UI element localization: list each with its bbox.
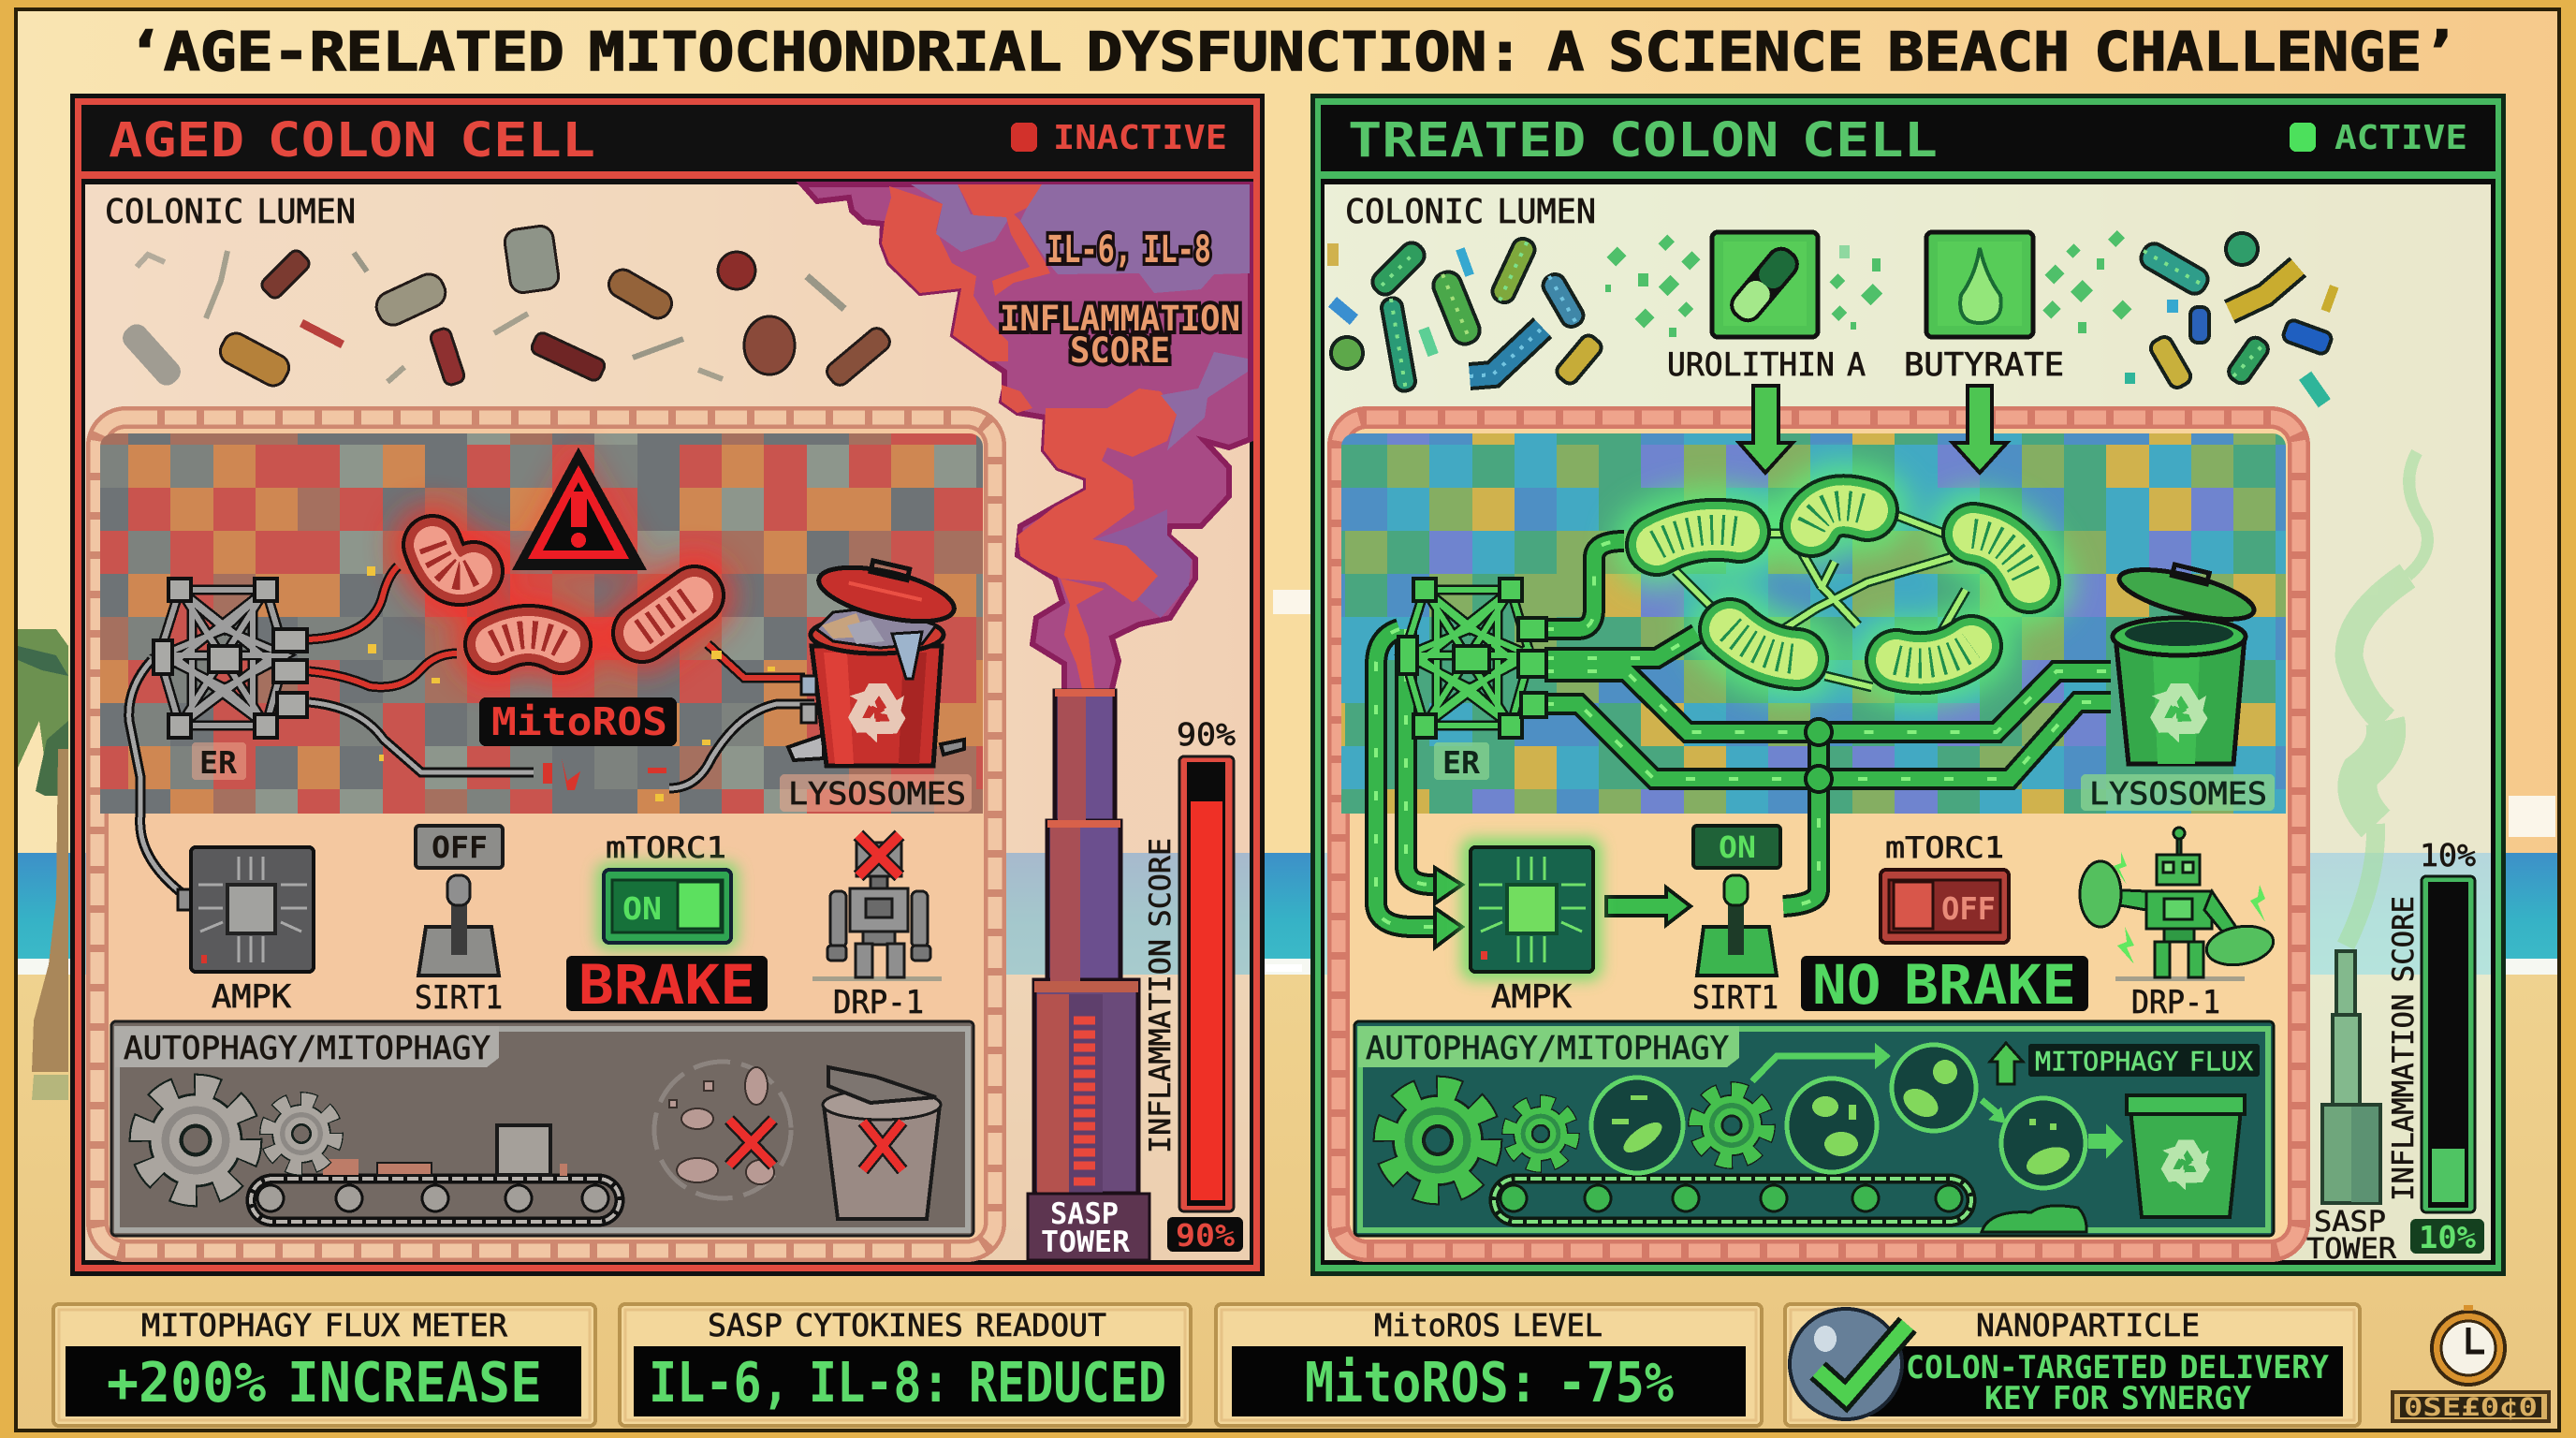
- tower indicator lights: [1074, 1020, 1095, 1181]
- SIRT1 lever: [1697, 875, 1777, 976]
- tab: AUTOPHAGY/MITOPHAGY: [124, 1030, 490, 1067]
- score counter: 0SE£0¢0: [2404, 1393, 2538, 1422]
- status: active: ACTIVE: [2334, 119, 2467, 157]
- stat card: SASP readout: [620, 1304, 1191, 1426]
- icon: overflowing lysosome bin: [788, 550, 964, 766]
- recycling bin: [2127, 1095, 2245, 1217]
- panel frame: [1310, 94, 2506, 1276]
- inflammation gauge 90%: [1167, 716, 1243, 1254]
- no brake label: NO BRAKE: [1812, 953, 2076, 1017]
- spinning gears: [1387, 1090, 1766, 1191]
- SIRT1 label: SIRT1: [1692, 979, 1778, 1017]
- SASP tower aged: SASP: [1050, 1197, 1119, 1231]
- stat card: mitophagy flux: +200% INCREASE: [107, 1350, 542, 1415]
- lysosomes label: LYSOSOMES: [2089, 775, 2267, 812]
- cell: aged: [97, 418, 995, 1251]
- header: aged colon cell: AGED COLON CELL: [109, 113, 595, 169]
- ER label: ER: [199, 744, 237, 781]
- mTORC1 toggle on: [596, 862, 739, 950]
- stat card: mitophagy flux: [53, 1304, 595, 1426]
- mitophagy flux tag: MITOPHAGY FLUX: [2035, 1046, 2253, 1077]
- SASP tower treated: TOWER: [2306, 1233, 2397, 1266]
- mTORC1 label: mTORC1: [606, 831, 726, 865]
- brake label: BRAKE: [578, 953, 755, 1017]
- icon: ER lattice: [154, 579, 307, 738]
- red glow: [432, 440, 695, 644]
- tab: AUTOPHAGY/MITOPHAGY: [1366, 1030, 1729, 1067]
- stat card: nanoparticle: NANOPARTICLE: [1976, 1307, 2200, 1343]
- metabolite particles: [1605, 230, 2132, 337]
- stat card: nanoparticle: [1785, 1304, 2360, 1426]
- ER label: [1434, 742, 1489, 781]
- bacteria: aged: [118, 225, 893, 390]
- AMPK chip active: [1461, 838, 1602, 980]
- sparks: [367, 566, 775, 801]
- AMPK chip inactive: [178, 847, 314, 972]
- lysosomes label: LYSOSOMES: [788, 775, 966, 812]
- coloured fragments: [1327, 243, 2338, 407]
- SIRT1 off tag: [416, 826, 503, 868]
- autophagosome vesicles: [1591, 1045, 2086, 1188]
- mTORC1 label: mTORC1: [1885, 831, 2004, 865]
- panel background: lumen: [85, 184, 1250, 1260]
- arrow: butyrate into cell: [1953, 386, 2007, 473]
- gears: [143, 1088, 334, 1193]
- cell membrane: [1339, 418, 2299, 1251]
- vertical label: inflammation score: INFLAMMATION SCORE: [1144, 838, 1178, 1153]
- tower label: SASP: [2314, 1206, 2386, 1239]
- SIRT1 on tag: ON: [1719, 829, 1756, 865]
- cell: treated: [1339, 386, 2299, 1251]
- icon: green lysosome bin: [2113, 552, 2261, 764]
- SASP tower aged: TOWER: [1041, 1225, 1130, 1259]
- ER label: ER: [1442, 744, 1480, 781]
- stat card: nanoparticle: COLON-TARGETED DELIVERY: [1906, 1349, 2330, 1387]
- cell membrane: [97, 418, 995, 1251]
- inflammation gauge 10%: [2410, 837, 2484, 1255]
- panel frame: [70, 94, 1265, 1276]
- inflammation gauge 90%: 90%: [1177, 716, 1236, 753]
- icon: ER lattice healthy: [1398, 579, 1546, 738]
- SIRT1 on tag: [1693, 826, 1780, 868]
- status: inactive: INACTIVE: [1053, 119, 1227, 157]
- status: active: [2290, 119, 2467, 157]
- moving conveyor: [1494, 1179, 1971, 1222]
- energised pipes: [1376, 541, 2111, 927]
- stat card: MitoROS level: MitoROS: -75%: [1305, 1350, 1674, 1415]
- stat card: mitophagy flux: MITOPHAGY FLUX METER: [141, 1307, 507, 1343]
- MitoROS label: MitoROS: [491, 699, 667, 744]
- panel background: lumen: [1325, 184, 2491, 1260]
- DRP-1 label: DRP-1: [833, 984, 924, 1021]
- healthy mitochondria network: [1657, 506, 2029, 687]
- icon: nanoparticle with check: [1790, 1309, 1908, 1419]
- damaged mitochondria: [432, 545, 695, 644]
- icon: active DRP-1 robot: [2080, 828, 2276, 981]
- title: ‘AGE-RELATED MITOCHONDRIAL DYSFUNCTION: A SCIENCE BEACH CHALLENGE’: [127, 22, 2458, 83]
- green glow: [1657, 506, 2029, 663]
- SASP tower aged: [1028, 689, 1149, 1260]
- urolithin label: UROLITHIN A: [1667, 346, 1866, 384]
- lumen label: COLONIC LUMEN: [1345, 193, 1596, 231]
- cytoplasm checker floor: [100, 433, 983, 814]
- mTORC1 toggle off: [1881, 870, 2009, 943]
- ER label: [192, 742, 246, 781]
- failed vesicle: [654, 1062, 791, 1198]
- pipe arrowheads: [1435, 868, 1690, 947]
- cytoplasm checker floor: [1341, 433, 2286, 814]
- inflammation gauge 10%: 10%: [2420, 837, 2476, 873]
- icon: urolithin A capsule: [1712, 232, 1818, 337]
- mTORC1 toggle on: ON: [622, 890, 662, 927]
- stat card: SASP readout: IL-6, IL-8: REDUCED: [649, 1350, 1166, 1415]
- stalled conveyor: [251, 1125, 620, 1222]
- right smoke: clean wisp: [2346, 452, 2427, 946]
- debris fragments: [137, 251, 844, 382]
- green blob: [1982, 1206, 2086, 1232]
- stat card: MitoROS level: [1216, 1304, 1762, 1426]
- header: treated colon cell: TREATED COLON CELL: [1348, 113, 1938, 169]
- panel: autophagy active: [1354, 1021, 2274, 1236]
- SASP smoke plume: [802, 184, 1251, 693]
- smoke labels: IL-6, IL-8: [1046, 228, 1211, 271]
- icon: broken DRP-1 robot: [812, 843, 942, 981]
- bacteria speckles: [1382, 241, 2263, 390]
- icon: clock: [2432, 1305, 2505, 1385]
- mitophagy flux tag: [1990, 1043, 2260, 1084]
- mTORC1 toggle off: OFF: [1941, 890, 1996, 927]
- smoke labels: SCORE: [1070, 330, 1170, 371]
- palm tree: [18, 629, 68, 1100]
- stat card: nanoparticle: KEY FOR SYNERGY: [1984, 1380, 2252, 1417]
- butyrate label: BUTYRATE: [1904, 346, 2064, 384]
- SIRT1 off tag: OFF: [432, 829, 488, 865]
- flux arrows: [1752, 1043, 2123, 1159]
- AMPK label: AMPK: [212, 978, 292, 1016]
- stat card: SASP readout: SASP CYTOKINES READOUT: [708, 1307, 1106, 1343]
- lumen label: COLONIC LUMEN: [105, 193, 356, 231]
- inflammation gauge 90%: 90%: [1176, 1217, 1235, 1254]
- tower label plate: [1028, 1194, 1149, 1260]
- SIRT1 lever: [418, 875, 499, 976]
- healthy bacteria: [1331, 233, 2334, 392]
- panel: treated colon cell: [1310, 94, 2506, 1276]
- panel: aged colon cell: [70, 94, 1265, 1276]
- red X on robot: [858, 835, 900, 876]
- DRP-1 label: DRP-1: [2131, 984, 2220, 1021]
- inflammation gauge 10%: 10%: [2419, 1219, 2476, 1255]
- AMPK label: AMPK: [1491, 978, 1573, 1016]
- smoke labels: [1000, 228, 1240, 371]
- arrow: urolithin into cell: [1739, 386, 1793, 473]
- panel: autophagy stalled: [111, 1021, 973, 1236]
- score counter: [2393, 1392, 2549, 1422]
- vertical label: inflammation score: INFLAMMATION SCORE: [2387, 896, 2421, 1201]
- warning triangle: [517, 453, 642, 567]
- stat card: MitoROS level: MitoROS LEVEL: [1374, 1307, 1603, 1343]
- SIRT1 label: SIRT1: [415, 979, 503, 1017]
- blocked bin: [823, 1067, 941, 1219]
- damaged wires: [129, 566, 814, 901]
- smoke labels: INFLAMMATION: [1000, 299, 1240, 339]
- icon: butyrate drop: [1926, 232, 2033, 337]
- SASP tower treated: [2306, 951, 2397, 1266]
